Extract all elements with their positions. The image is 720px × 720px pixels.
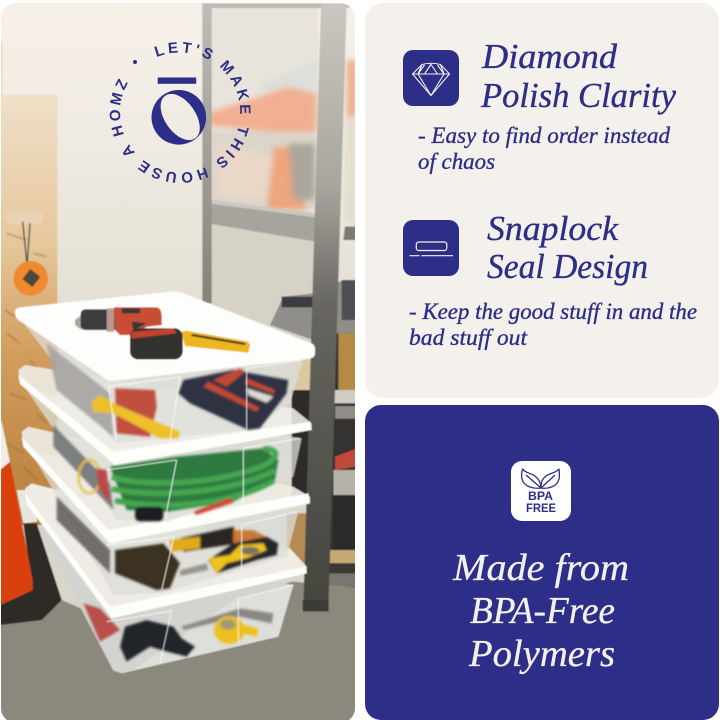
icon: snaplock seal bbox=[403, 220, 459, 276]
lid of bottom bin bbox=[25, 483, 307, 618]
icon: BPA free leaves badge: FREE bbox=[526, 501, 556, 515]
icon: diamond bbox=[403, 50, 459, 106]
metal shelf frame bbox=[202, 3, 357, 611]
third storage bin bbox=[30, 450, 298, 595]
right side dark shelving with items bbox=[270, 280, 357, 600]
wooden board leaning on the wall bbox=[0, 42, 57, 525]
heading: Snaplock Seal Design: Seal Design bbox=[487, 248, 648, 286]
description: easy to find order bbox=[418, 123, 671, 174]
description: keep the good stuff in bbox=[409, 299, 697, 350]
traffic cone with base bbox=[0, 418, 62, 625]
heading: Diamond Polish Clarity: Diamond bbox=[481, 38, 618, 76]
panel: product photo of stacked storage bins bbox=[0, 0, 357, 720]
headline: Made from BPA-Free Polymers: BPA-Free bbox=[470, 590, 615, 632]
headline: Made from BPA-Free Polymers: Polymers bbox=[468, 633, 615, 675]
heading: Diamond Polish Clarity bbox=[480, 38, 677, 115]
headline: Made from BPA-Free Polymers: Made from bbox=[452, 547, 629, 589]
panel: BPA-free callout bbox=[365, 405, 719, 720]
second storage bin bbox=[27, 390, 302, 522]
bin contents: stapler and ruler bbox=[47, 343, 288, 438]
bottom storage bin bbox=[38, 527, 293, 673]
lid of top bin bbox=[15, 291, 315, 381]
heading: Snaplock Seal Design: Snaplock bbox=[487, 210, 619, 248]
wall behind lower shelf bbox=[212, 224, 314, 436]
description: keep the good stuff in: - Keep the good stuff in and the bbox=[409, 299, 697, 324]
garage wall background bbox=[1, 3, 355, 608]
icon: BPA free leaves badge: BPA bbox=[528, 489, 553, 503]
circular slogan text: LET'S MAKE THIS HOUSE A HOMZ bbox=[110, 42, 250, 183]
icon: orange tape measure on a peg bbox=[13, 222, 48, 296]
bin contents: green hose bbox=[53, 425, 278, 521]
cordless drill and yellow tool on lid bbox=[75, 307, 250, 359]
icon: BPA free leaves badge bbox=[511, 461, 571, 521]
description: easy to find order: of chaos bbox=[418, 149, 495, 174]
description: keep the good stuff in: bad stuff out bbox=[409, 325, 528, 350]
top storage bin bbox=[25, 325, 303, 443]
bin contents: hand tools bbox=[57, 497, 278, 590]
heading: Diamond Polish Clarity: Polish Clarity bbox=[480, 77, 677, 115]
heading: Snaplock Seal Design bbox=[487, 210, 648, 286]
headline: Made from BPA-Free Polymers bbox=[452, 547, 629, 675]
logo: circular brand badge bbox=[110, 42, 250, 183]
panel: features bbox=[365, 3, 719, 398]
concrete floor bbox=[0, 582, 357, 720]
white skirting bbox=[17, 490, 37, 523]
lid of second bin bbox=[18, 365, 312, 465]
brand mark: barred letter o bbox=[151, 78, 206, 145]
bin contents: gloves, tape and clamp bbox=[83, 603, 273, 662]
shelf compartment with orange clothing bbox=[207, 7, 357, 223]
bullet dot in slogan bbox=[133, 60, 137, 64]
description: easy to find order: - Easy to find order instead bbox=[418, 123, 671, 148]
lid of third bin bbox=[22, 427, 310, 543]
